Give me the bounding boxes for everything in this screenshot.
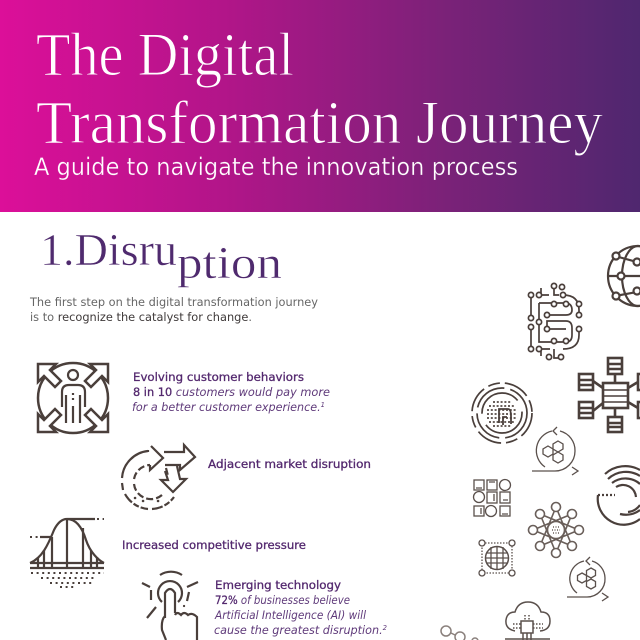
icon: star network — [528, 502, 584, 558]
section heading: 1.Disruption — [40, 225, 282, 288]
text: evolving customer behaviors: for a better customer experience. — [132, 400, 326, 414]
icon: concentric arcs — [598, 466, 640, 525]
text: evolving customer behaviors: 8 in 10 customers would pay more — [133, 385, 330, 399]
title: The Digital — [36, 22, 294, 89]
icon: server network — [579, 358, 640, 432]
title: Transformation Journey — [36, 90, 603, 157]
icon: bell curve — [30, 519, 104, 587]
icon: person with outward arrows — [38, 363, 108, 433]
text: evolving customer behaviors: Evolving customer behaviors — [133, 370, 304, 384]
text: evolving customer behaviors: 1 — [321, 401, 325, 409]
text: emerging technology: cause the greatest disruption. — [214, 623, 387, 637]
intro text: The first step on the digital transformation journey — [29, 295, 318, 309]
title — [36, 22, 603, 157]
icon: circuit bitcoin — [528, 283, 582, 360]
section heading: 1.Disruption: ption — [177, 238, 282, 288]
text: emerging technology: 72% of businesses believe — [215, 593, 350, 607]
text: emerging technology: Artificial Intelligence (AI) will — [214, 608, 367, 622]
icon: hexagon cycle 1 — [532, 427, 578, 475]
icon: tapping hand — [142, 572, 198, 640]
icon: hexagon cycle 2 — [567, 557, 608, 601]
text: emerging technology — [214, 578, 388, 637]
header banner — [0, 0, 640, 212]
icon: cloud chip — [505, 602, 550, 640]
text: emerging technology: Emerging technology — [215, 578, 341, 592]
icon: circular arrows — [122, 445, 195, 509]
text: increased competitive pressure: Increased competitive pressure — [122, 538, 306, 552]
icon: squares and circles grid — [474, 480, 510, 516]
icon: globe network — [608, 246, 640, 306]
intro text: is to recognize the catalyst for change. — [30, 310, 252, 324]
text: emerging technology: 2 — [383, 624, 388, 632]
icon: fingerprint radar — [472, 383, 532, 443]
text: adjacent market disruption: Adjacent market disruption — [208, 457, 371, 471]
text: evolving customer behaviors — [132, 370, 330, 414]
icon: molecule fragment — [441, 626, 478, 640]
icon: globe in frame — [479, 540, 515, 576]
subtitle: A guide to navigate the innovation process — [34, 153, 518, 181]
section heading: 1.Disruption: 1.Disru — [40, 225, 177, 275]
intro text — [29, 295, 318, 324]
